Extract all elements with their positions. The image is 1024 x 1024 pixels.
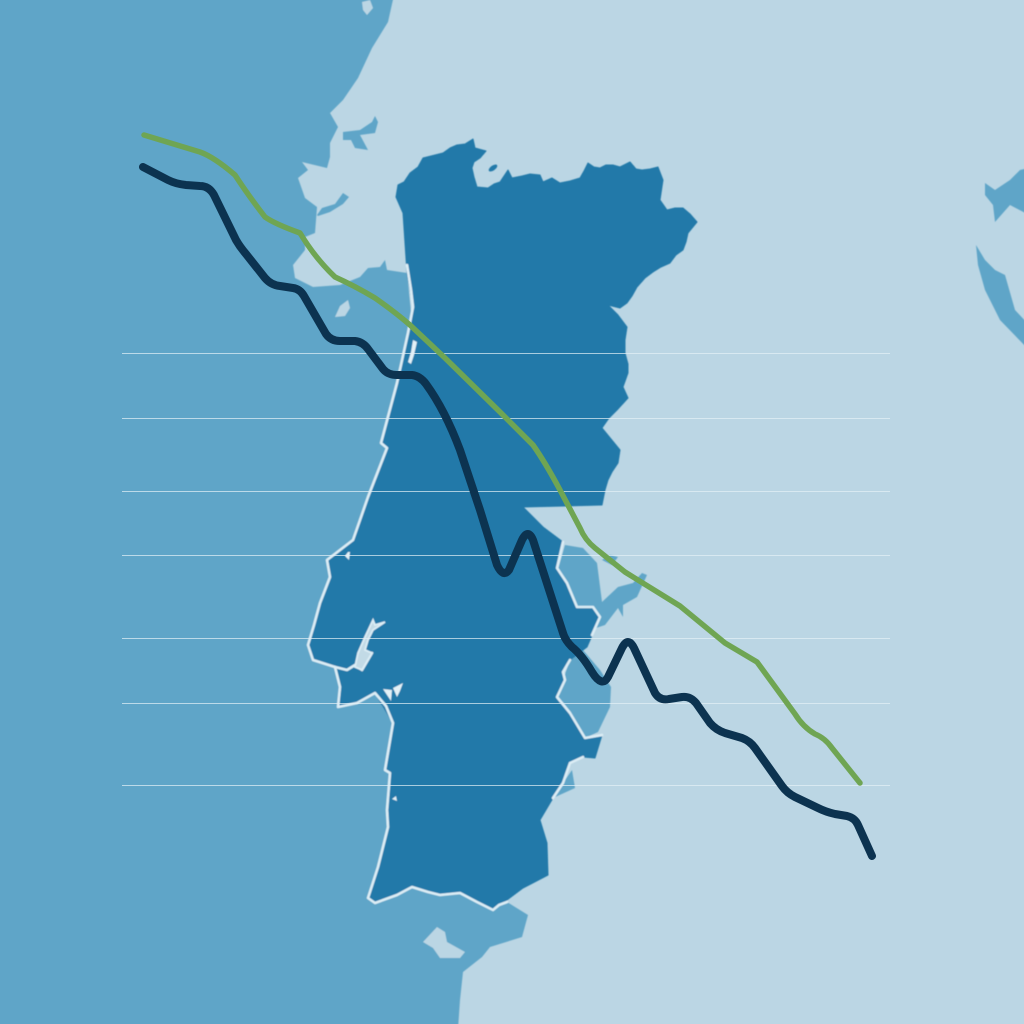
small dark island	[488, 163, 498, 173]
coastline: white outlines	[308, 265, 602, 910]
small inlet	[317, 193, 349, 216]
estuary: light inlet	[355, 620, 385, 670]
small lagoon north	[343, 116, 378, 150]
panel: eastern coastal waters	[553, 545, 647, 798]
small white marks	[345, 340, 417, 801]
panel: western sea	[0, 0, 528, 1024]
island: southern islet	[423, 927, 465, 958]
line chart: green series	[144, 135, 860, 783]
panel: main country	[308, 139, 697, 910]
grid lines	[122, 354, 890, 786]
panel: right side landmasses	[976, 168, 1024, 350]
island: light islet	[335, 300, 350, 317]
small island top	[362, 0, 373, 15]
line chart: dark navy series	[143, 167, 872, 856]
